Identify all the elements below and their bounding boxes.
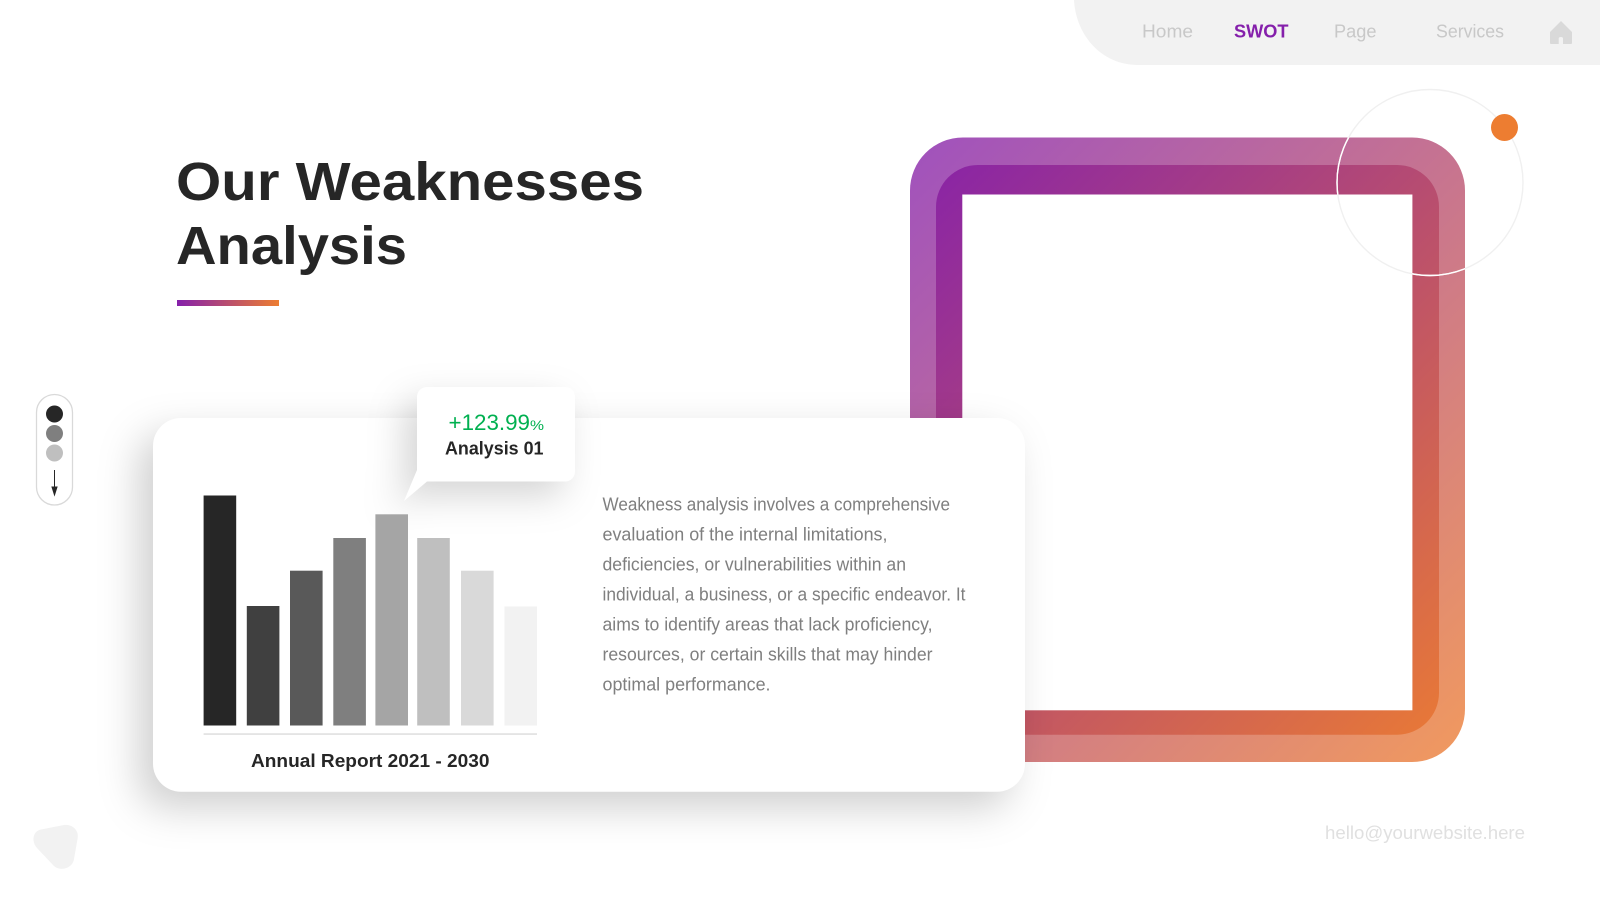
decorative ring [1337,90,1523,276]
description text: evaluation of the internal limitations, [602,524,888,544]
title: Analysis [176,216,407,276]
nav item: Page: Page [1334,22,1376,42]
gradient frame [910,138,1465,762]
chart caption: Annual Report 2021 - 2030 [251,751,490,771]
frame interior [962,194,1412,710]
nav item: Home: Home [1142,22,1193,42]
outer frame band [910,138,1465,762]
card background [153,418,1025,792]
pager dot 3 [46,444,63,462]
bar 3 [290,571,323,726]
chart baseline [204,733,537,735]
title [176,152,644,276]
bar 6 [417,538,450,726]
description text: optimal performance. [602,674,770,694]
title: Our Weaknesses [176,152,644,212]
bar 7 [461,571,494,726]
orange dot [1491,114,1518,141]
bar 2 [247,606,279,726]
description text: deficiencies, or vulnerabilities within an [602,554,906,574]
decorative blob [34,825,78,869]
bar 8 [504,606,537,726]
callout percent: % [530,417,544,433]
bar 5 [375,514,408,726]
callout bubble [404,387,575,501]
bar 1 [204,496,236,726]
bar 4 [333,538,366,726]
description text: aims to identify areas that lack proficiency, [602,614,932,634]
description text [602,494,966,694]
callout label: Analysis 01 [445,438,544,458]
nav background [1074,0,1600,65]
bar chart [204,496,537,771]
arrow: down [52,470,57,495]
pager dot 2 [46,425,63,442]
callout [404,387,575,501]
nav item: SWOT: SWOT [1234,22,1288,42]
middle frame band [936,165,1439,735]
panel: report card [153,387,1025,792]
navigation bar [1074,0,1600,65]
pager outline [36,394,72,505]
nav item: Services: Services [1436,22,1504,42]
description text: Weakness analysis involves a comprehensive [602,494,950,514]
icon: home [1550,21,1572,44]
side pager [36,394,72,505]
email: hello@yourwebsite.here [1325,823,1525,843]
description text: individual, a business, or a specific endeavor. It [602,584,966,604]
callout value: +123.99 [448,410,530,435]
description text: resources, or certain skills that may hinder [602,644,932,664]
pager dot 1 [46,406,63,422]
title underline [177,300,279,306]
